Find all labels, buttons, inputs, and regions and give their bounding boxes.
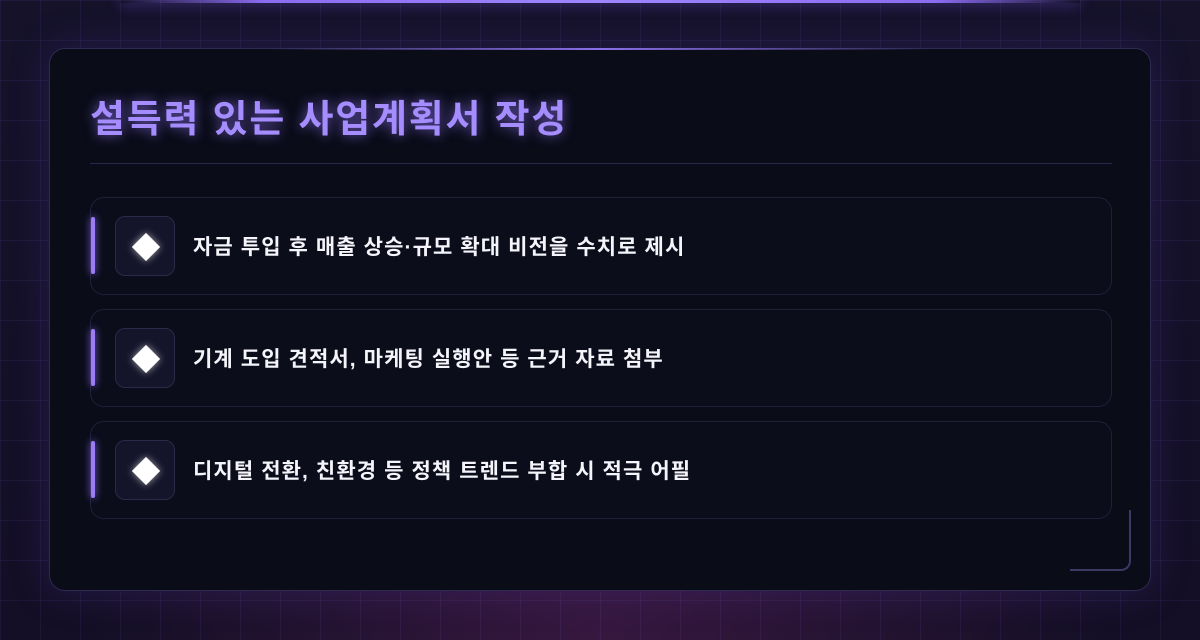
item 2 (90, 309, 1112, 407)
item 1: 자금 투입 후 매출 상승·규모 확대 비전을 수치로 제시 (193, 236, 685, 259)
item 3: 디지털 전환, 친환경 등 정책 트렌드 부합 시 적극 어필 (193, 460, 691, 483)
title: 설득력 있는 사업계획서 작성 (90, 99, 568, 141)
item 2: 기계 도입 견적서, 마케팅 실행안 등 근거 자료 첨부 (193, 348, 664, 371)
item 1 (90, 197, 1112, 295)
item 3 (90, 421, 1112, 519)
panel: main card (49, 48, 1151, 591)
